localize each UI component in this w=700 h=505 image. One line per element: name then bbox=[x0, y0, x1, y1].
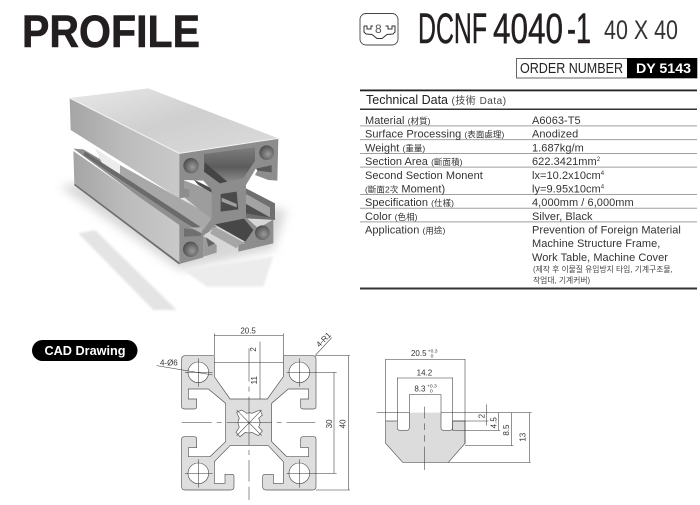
row labels: Material (材質) bbox=[365, 115, 431, 127]
row values: 작업대, 기계커버) bbox=[533, 275, 591, 285]
row values: Silver, Black bbox=[532, 211, 593, 223]
corner holes bbox=[188, 362, 310, 484]
centre lines and dimensions bbox=[157, 333, 350, 500]
CAD drawing: 40x40 cross-section bbox=[157, 327, 350, 500]
dimension labels bbox=[411, 348, 528, 442]
row labels: Weight (重量) bbox=[365, 142, 425, 154]
row values: 622.3421mm bbox=[532, 156, 597, 168]
model name bbox=[418, 5, 591, 53]
row values: 2 bbox=[597, 157, 601, 163]
dimension labels: 8.3 bbox=[414, 385, 426, 394]
dimension labels: 2 bbox=[477, 413, 486, 418]
left rear rail bbox=[183, 180, 213, 220]
dimension labels: 2 bbox=[249, 347, 258, 352]
dimension labels bbox=[160, 327, 347, 428]
table heading: Technical Data (技術 Data) bbox=[366, 93, 507, 107]
row values: lx=10.2x10cm bbox=[532, 170, 601, 182]
top cavity bbox=[204, 147, 255, 183]
row labels: (斷面2次 Moment) bbox=[365, 184, 445, 196]
dimension labels: 11 bbox=[250, 375, 259, 384]
size label: 40 X 40 bbox=[604, 15, 678, 45]
model name: 4040 bbox=[493, 5, 563, 53]
row labels: Section Area (斷面積) bbox=[365, 156, 463, 168]
row values: (제작 후 이물질 유입방지 타입, 기계구조물, bbox=[533, 264, 673, 274]
profile outline bbox=[182, 356, 316, 490]
dimension labels: 14.2 bbox=[417, 368, 433, 377]
row labels: Surface Processing (表面處理) bbox=[365, 128, 504, 140]
CAD drawing badge bbox=[32, 340, 138, 361]
dimension labels: 20.5 bbox=[411, 349, 427, 358]
edge highlight bbox=[70, 98, 278, 153]
row values: Work Table, Machine Cover bbox=[532, 252, 668, 264]
centre bore bbox=[236, 410, 262, 437]
row labels: Specification (仕樣) bbox=[365, 197, 454, 209]
right rear rail bbox=[246, 188, 275, 220]
model name: DCNF bbox=[418, 5, 487, 53]
lower side face bbox=[73, 151, 179, 264]
slot section bbox=[386, 413, 465, 462]
channel between halves bbox=[73, 149, 217, 233]
upper side face bbox=[70, 98, 179, 198]
order number: ORDER NUMBER bbox=[520, 61, 623, 77]
dimension labels: 30 bbox=[325, 419, 334, 428]
dimension labels: +0.3 bbox=[427, 383, 437, 389]
order number: DY 5143 bbox=[636, 60, 691, 76]
row labels: Color (色相) bbox=[365, 211, 418, 223]
row values: ly=9.95x10cm bbox=[532, 184, 601, 196]
model name: -1 bbox=[567, 5, 591, 53]
dimension labels: 8.5 bbox=[502, 424, 511, 436]
top right lip recess bbox=[256, 165, 272, 172]
dimension labels: 0 bbox=[431, 354, 434, 360]
order number bbox=[516, 58, 697, 78]
dimension labels: 20.5 bbox=[240, 327, 256, 336]
dimension lines bbox=[377, 359, 532, 470]
dimension labels: 4-R1 bbox=[314, 330, 333, 349]
corner holes bbox=[183, 158, 199, 173]
technical data table bbox=[360, 90, 697, 290]
floor shadow bbox=[60, 183, 287, 310]
row values bbox=[532, 115, 681, 285]
bottom hook bbox=[203, 236, 217, 257]
row values: 4 bbox=[601, 171, 605, 177]
lower cavity bbox=[215, 219, 253, 242]
row values: 4 bbox=[601, 184, 605, 190]
rear interior of the section bbox=[179, 138, 278, 264]
row values: Machine Structure Frame, bbox=[532, 238, 660, 250]
row values: 1.687kg/m bbox=[532, 142, 584, 154]
product photo: aluminium profile bbox=[60, 88, 287, 310]
end face bbox=[179, 138, 278, 264]
dimension labels: 13 bbox=[519, 432, 528, 442]
top face bbox=[70, 88, 278, 153]
lower left slot bbox=[184, 228, 203, 237]
row labels: Application (用途) bbox=[365, 224, 445, 236]
row values: Anodized bbox=[532, 128, 578, 140]
row values: 4,000mm / 6,000mm bbox=[532, 197, 634, 209]
dimension labels: +0.3 bbox=[428, 348, 438, 354]
icon: profile slot bbox=[360, 14, 398, 45]
row labels bbox=[365, 115, 504, 236]
dimension labels: 4-Ø6 bbox=[160, 359, 178, 368]
icon: profile slot: 8 bbox=[375, 22, 382, 36]
dimension labels: 0 bbox=[430, 389, 433, 395]
row values: A6063-T5 bbox=[532, 115, 581, 127]
dimension labels: 4.5 bbox=[489, 417, 498, 428]
row labels: Second Section Monent bbox=[365, 170, 483, 182]
title: PROFILE bbox=[22, 6, 200, 57]
row values: Prevention of Foreign Material bbox=[532, 224, 681, 236]
centre bore bbox=[221, 192, 238, 212]
dimension labels: 40 bbox=[338, 419, 347, 428]
CAD drawing badge: CAD Drawing bbox=[44, 344, 125, 358]
CAD drawing: slot detail bbox=[377, 348, 532, 470]
